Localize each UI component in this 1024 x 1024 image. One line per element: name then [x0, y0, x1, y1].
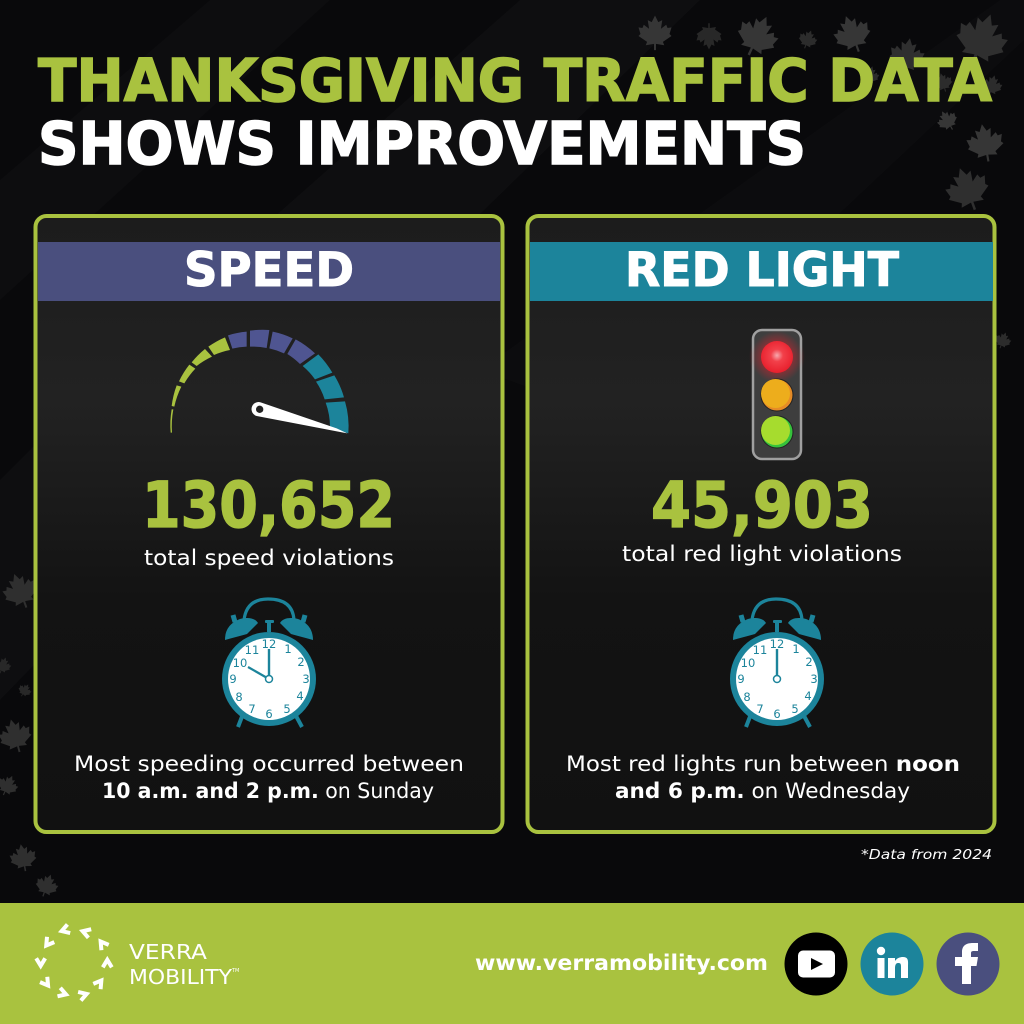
icon: alarm clock 10 to 12: 8 [235, 690, 243, 704]
icon: alarm clock 12: 11 [753, 643, 767, 657]
icon: alarm clock 10 to 12: 1 [284, 642, 292, 656]
icon: alarm clock 12: 2 [805, 655, 813, 669]
logo: Verra Mobility: VERRA [129, 940, 207, 964]
icon: alarm clock 12: 7 [756, 702, 764, 716]
icon: alarm clock 12: 12 [770, 637, 784, 651]
red light count label: total red light violations [622, 542, 902, 567]
icon: alarm clock 12: 4 [804, 689, 812, 703]
logo: Verra Mobility: MOBILITY [129, 965, 233, 989]
icon: traffic light [749, 329, 805, 459]
red light description: and 6 p.m. on Wednesday [615, 779, 910, 804]
icon: alarm clock 12 [730, 599, 824, 727]
icon: speedometer gauge [170, 330, 349, 433]
icon: alarm clock 12: 3 [810, 672, 818, 686]
speed count label: total speed violations [144, 546, 394, 571]
speed description: 10 a.m. and 2 p.m. on Sunday [102, 779, 434, 804]
icon: alarm clock 10 to 12: 3 [302, 672, 310, 686]
icon: alarm clock 10 to 12: 4 [296, 689, 304, 703]
icon: alarm clock 10 to 12: 2 [297, 655, 305, 669]
gauge needle [252, 402, 347, 433]
icon: alarm clock 12: 9 [737, 672, 745, 686]
speed count: 130,652 [142, 469, 395, 542]
icon: alarm clock 10 to 12: 12 [262, 637, 276, 651]
logo: Verra Mobility [36, 924, 239, 1001]
speed description [74, 752, 464, 804]
speed header: SPEED [184, 243, 354, 298]
icon: alarm clock 12: 5 [791, 702, 799, 716]
icon: alarm clock 10 to 12: 11 [245, 643, 259, 657]
icon: alarm clock 10 to 12: 5 [283, 702, 291, 716]
icon: alarm clock 10 to 12: 10 [233, 656, 247, 670]
icon: alarm clock 12: 10 [741, 656, 755, 670]
icon: Facebook [936, 932, 1000, 996]
red light count: 45,903 [651, 469, 873, 542]
speed description: Most speeding occurred between [74, 752, 464, 777]
website url: www.verramobility.com [475, 951, 768, 975]
red light description [566, 752, 960, 804]
red light header: RED LIGHT [625, 243, 899, 298]
icon: alarm clock 12: 8 [743, 690, 751, 704]
title [38, 46, 992, 178]
footer band [0, 903, 1024, 1024]
data footnote: *Data from 2024 [861, 847, 992, 863]
red light description: Most red lights run between noon [566, 752, 960, 777]
icon: alarm clock 12: 1 [792, 642, 800, 656]
icon: LinkedIn [860, 932, 924, 996]
icon: alarm clock 10 to 12: 9 [229, 672, 237, 686]
speed header [38, 242, 500, 301]
panel: speed [36, 216, 502, 832]
title: SHOWS IMPROVEMENTS [38, 109, 806, 178]
icon: YouTube [784, 932, 848, 996]
red light header [530, 242, 993, 301]
icon: alarm clock 12: 6 [773, 707, 781, 721]
icon: alarm clock 10 to 12: 7 [248, 702, 256, 716]
icon: alarm clock 10 to 12: 6 [265, 707, 273, 721]
title: THANKSGIVING TRAFFIC DATA [38, 46, 992, 115]
logo: Verra Mobility: TM [231, 968, 239, 974]
icon: alarm clock 10 to 12 [222, 599, 316, 727]
panel: red light [528, 216, 994, 832]
